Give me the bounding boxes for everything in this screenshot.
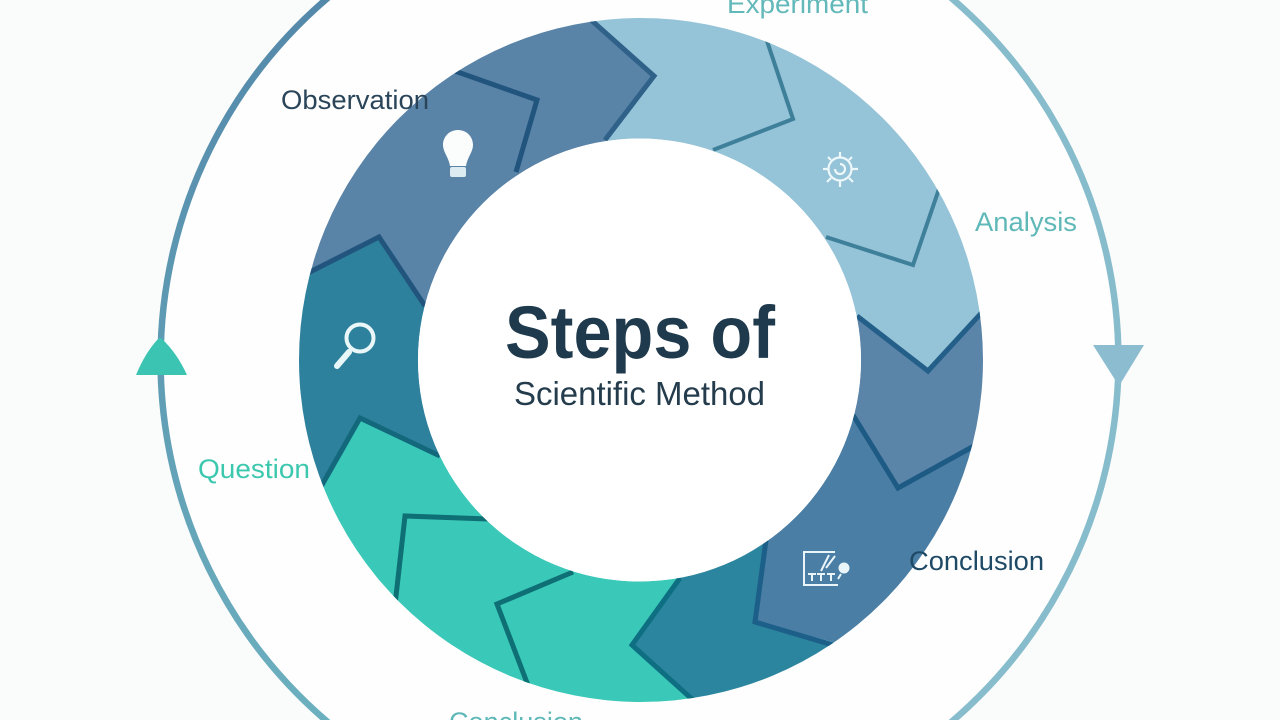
label: question: Question <box>198 454 310 484</box>
chevron line: right lower <box>853 415 974 488</box>
chevron line: top left <box>452 70 537 172</box>
segment: question teal <box>322 421 690 702</box>
background inner disc <box>162 0 1118 720</box>
icon: magnifying glass <box>337 324 374 366</box>
icon: gear <box>823 152 858 187</box>
infographic canvas <box>136 0 1144 720</box>
chevron line: left upper <box>306 237 425 306</box>
chevron line: bottom right <box>755 540 836 646</box>
chevron line: left lower <box>318 418 440 492</box>
ring: right arc <box>949 0 1118 720</box>
chevron line: bottom left <box>395 516 488 605</box>
chevron line: right <box>857 309 985 371</box>
ring: left arc <box>161 0 330 720</box>
chevron line: bottom <box>632 578 693 700</box>
segment: analysis slate <box>854 314 983 484</box>
segment: observation slate <box>310 22 651 304</box>
chevron line: right upper <box>826 186 940 265</box>
chevron outlines <box>306 19 985 700</box>
segment: experiment light blue <box>592 18 980 368</box>
arrow: downward right <box>1093 345 1144 386</box>
icon: light bulb <box>443 130 473 177</box>
label: conclusion right: Conclusion <box>909 546 1044 576</box>
chevron line: top <box>590 19 654 140</box>
outer cycle ring <box>161 0 1118 720</box>
chevron line: bottom middle <box>497 572 573 688</box>
subtitle: Scientific Method <box>514 375 765 412</box>
title: Steps of <box>505 291 775 374</box>
segment: deep teal blue <box>635 542 834 698</box>
chevron line: top right <box>713 38 793 150</box>
segment: hypothesis teal blue <box>299 240 439 484</box>
segment: conclusion blue <box>758 418 972 643</box>
center white circle <box>418 138 861 582</box>
label: observation: Observation <box>281 85 429 115</box>
icon: chart with question mark <box>804 551 848 585</box>
segmented chevron donut <box>299 18 983 702</box>
arrow: upward left <box>136 338 187 375</box>
label: analysis: Analysis <box>975 207 1077 237</box>
